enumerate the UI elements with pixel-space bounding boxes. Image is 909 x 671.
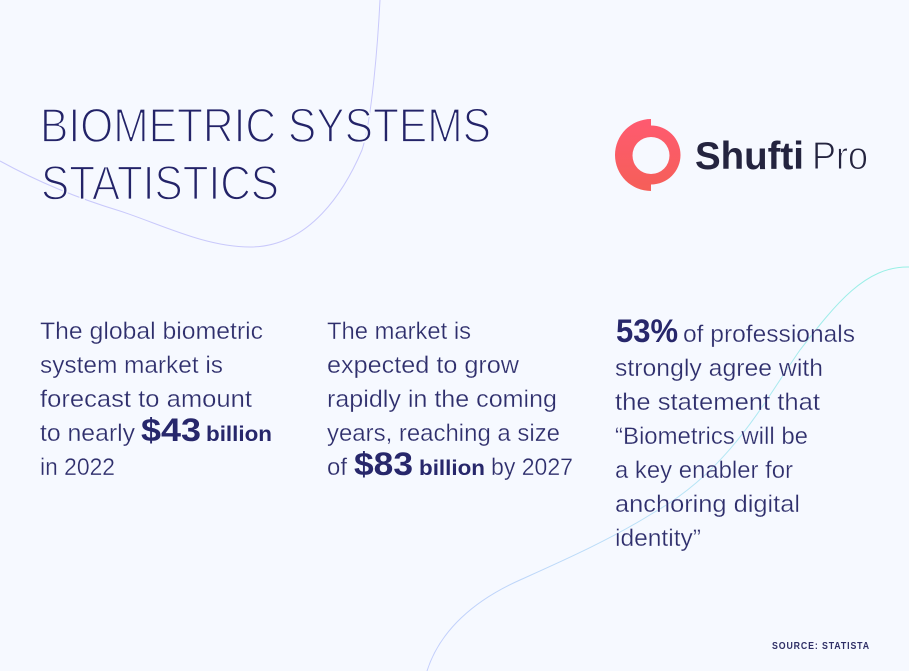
logo wordmark: Shufti: [695, 135, 804, 178]
icon: Shufti Pro logo mark: [615, 119, 680, 191]
text block: professionals statistic: “Biometrics will be: [615, 423, 808, 450]
decorative curve: right side: [427, 267, 909, 671]
text block: market growth: of: [327, 454, 347, 481]
text block: professionals statistic: of professionals: [683, 321, 855, 348]
logo wordmark: [695, 135, 868, 178]
text block: professionals statistic: identity”: [615, 525, 701, 552]
title: [40, 100, 491, 210]
text block: professionals statistic: strongly agree with: [615, 355, 823, 382]
text block: market growth: years, reaching a size: [327, 420, 560, 447]
text block: professionals statistic: anchoring digital: [615, 491, 800, 518]
text block: professionals statistic: 53%: [616, 313, 678, 349]
title: STATISTICS: [41, 158, 279, 210]
source note: SOURCE: STATISTA: [772, 641, 870, 652]
title: BIOMETRIC SYSTEMS: [40, 100, 491, 153]
text block: professionals statistic: [615, 313, 855, 552]
text block: market growth: $83: [354, 446, 413, 482]
text block: market growth: by 2027: [491, 454, 573, 481]
text block: global market forecast: The global biometric: [40, 318, 263, 345]
text block: global market forecast: to nearly: [40, 420, 135, 447]
text block: market growth: The market is: [327, 318, 471, 345]
text block: market growth: expected to grow: [327, 352, 520, 379]
text block: market growth: rapidly in the coming: [327, 386, 557, 413]
text block: market growth: [327, 318, 573, 482]
text block: global market forecast: system market is: [40, 352, 223, 379]
text block: global market forecast: billion: [206, 422, 272, 446]
text block: market growth: billion: [419, 456, 485, 480]
text block: global market forecast: [40, 318, 272, 481]
logo wordmark: Pro: [812, 135, 868, 178]
text block: global market forecast: in 2022: [40, 454, 115, 481]
decorative curve: top left: [0, 0, 380, 247]
text block: global market forecast: $43: [141, 412, 201, 448]
text block: global market forecast: forecast to amount: [40, 386, 252, 413]
text block: professionals statistic: the statement that: [615, 389, 820, 416]
text block: professionals statistic: a key enabler for: [615, 457, 793, 484]
